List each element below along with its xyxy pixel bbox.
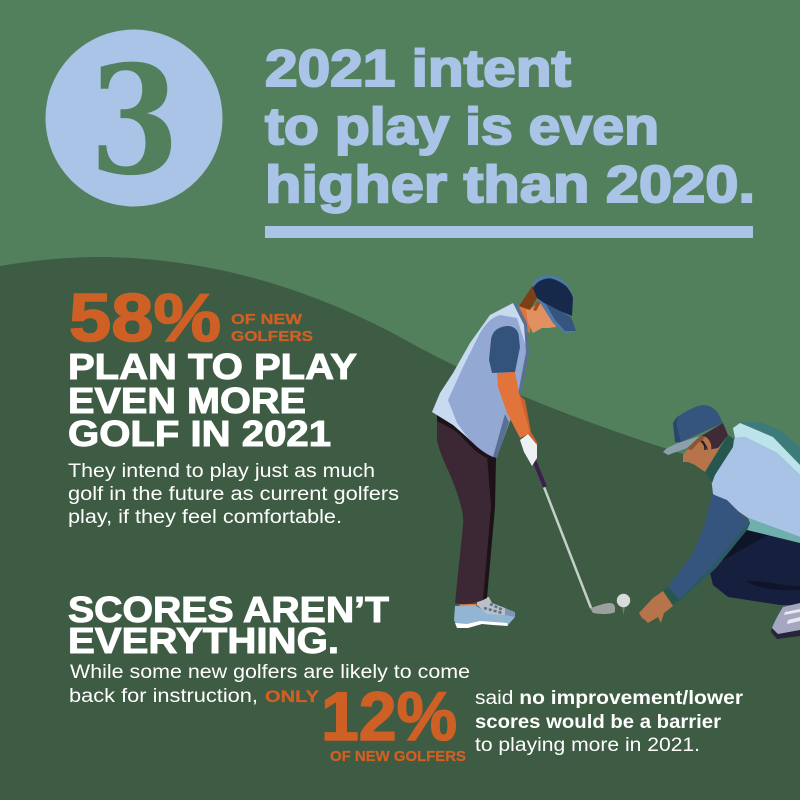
- heading: plan to play: EVEN MORE: [68, 380, 306, 421]
- sleeve: [663, 494, 750, 604]
- body text: instruction: back for instruction,: [69, 686, 258, 707]
- number badge: [46, 30, 222, 208]
- glove: [520, 434, 537, 466]
- heading: plan to play: [68, 346, 357, 454]
- vest: [711, 437, 800, 537]
- 12% statistic: 12%: [321, 678, 457, 755]
- body text: barrier: to playing more in 2021.: [475, 735, 700, 756]
- shoe: [771, 603, 800, 639]
- heading: scores: SCORES AREN’T: [68, 589, 389, 630]
- body text: barrier: said no improvement/lower: [475, 688, 744, 709]
- back of vest: [740, 422, 800, 465]
- body text: instruction: ONLY: [265, 687, 320, 706]
- title: to play is even: [265, 98, 659, 156]
- 58% statistic: GOLFERS: [231, 328, 313, 345]
- body text: intent: They intend to play just as much: [68, 461, 375, 482]
- collar light band: [733, 423, 800, 475]
- neck: [518, 306, 530, 333]
- heading: plan to play: GOLF IN 2021: [68, 413, 331, 454]
- heading: scores: EVERYTHING.: [68, 620, 339, 661]
- near arm: [497, 372, 530, 438]
- standing golfer: [432, 276, 630, 628]
- heading: scores: [68, 589, 389, 661]
- body text: barrier: [475, 688, 744, 756]
- body text: intent: [68, 461, 399, 528]
- sleeve: [489, 326, 520, 373]
- 12% statistic: OF NEW GOLFERS: [330, 748, 466, 765]
- head: [519, 276, 577, 333]
- body text: barrier: scores would be a barrier: [475, 712, 722, 733]
- number badge: 3: [90, 33, 179, 208]
- club: [534, 460, 615, 614]
- title: [265, 40, 755, 214]
- ball on tee: [617, 594, 630, 615]
- title: 2021 intent: [265, 40, 571, 98]
- head: [663, 405, 728, 472]
- far arm: [519, 395, 538, 450]
- 58% statistic: OF NEW: [231, 311, 303, 328]
- 58% statistic: [69, 280, 313, 356]
- trousers: [710, 530, 800, 605]
- body text: instruction: While some new golfers are likely to come: [70, 662, 470, 683]
- body text: intent: play, if they feel comfortable.: [68, 507, 342, 528]
- crouching golfer: [639, 405, 800, 639]
- hand: [639, 591, 673, 623]
- collar: [705, 435, 734, 483]
- vest: [432, 303, 529, 458]
- 58% statistic: 58%: [69, 280, 221, 356]
- vest hem: [747, 518, 800, 543]
- body text: instruction: [69, 662, 470, 707]
- heading: plan to play: PLAN TO PLAY: [68, 346, 357, 387]
- title: higher than 2020.: [265, 156, 755, 214]
- shoe: [454, 597, 515, 628]
- body text: intent: golf in the future as current golfers: [68, 484, 399, 505]
- title underline: [265, 226, 753, 238]
- trousers: [437, 415, 496, 604]
- dark green hill: [0, 257, 800, 800]
